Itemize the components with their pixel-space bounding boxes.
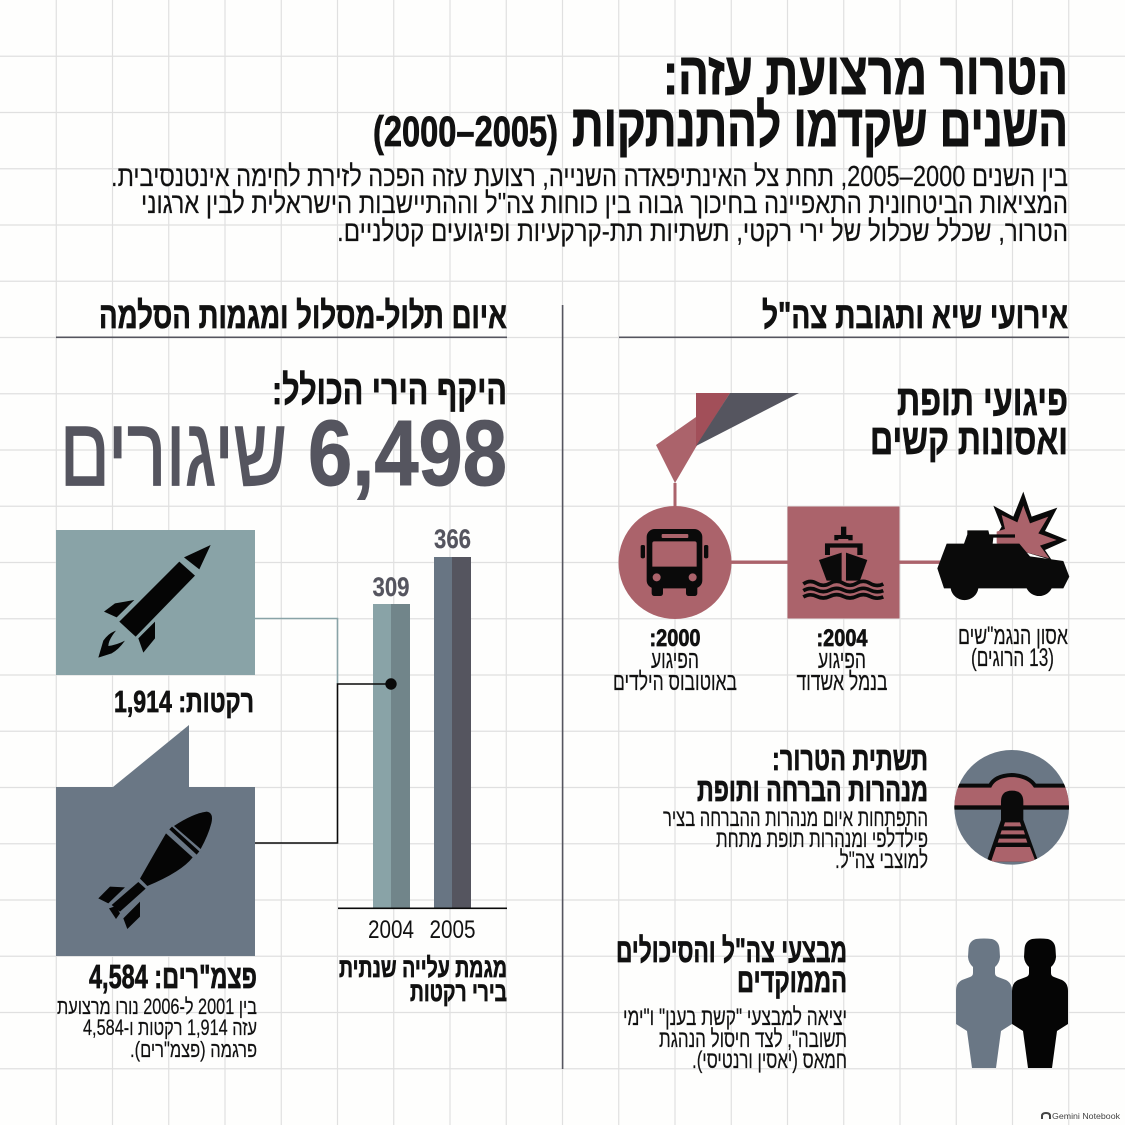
label: APC disaster: אסון הנגמ"שים xyxy=(958,622,1068,650)
icon: APC with explosion xyxy=(937,492,1069,600)
label: APC disaster xyxy=(958,622,1068,672)
label: 2004 Ashdod port attack: הפיגוע xyxy=(818,646,866,674)
caption: chart: מגמת עלייה שנתית xyxy=(339,953,507,983)
connector: rockets to chart xyxy=(255,618,338,684)
text: mortars: בין 2001 ל-2006 נורו מרצועת xyxy=(57,994,257,1019)
bar chart xyxy=(338,524,507,944)
footer: watermark: Gemini Notebook xyxy=(1052,1111,1121,1121)
panel: rockets xyxy=(56,530,255,719)
icon: two silhouettes xyxy=(956,938,1068,1068)
heading: IDF operations: מבצעי צה"ל והסיכולים xyxy=(616,932,847,970)
icon: rocket xyxy=(98,545,211,658)
label: 2004 Ashdod port attack: :2004 xyxy=(816,625,868,652)
heading: IDF operations xyxy=(616,932,847,1000)
heading: tunnels: מנהרות הברחה ותופת xyxy=(697,771,928,808)
text: tunnels: למוצבי צה"ל. xyxy=(835,847,928,874)
text: IDF operations: חמאס (יאסין ורנטיסי). xyxy=(692,1047,847,1074)
label: APC disaster: (13 הרוגים) xyxy=(971,644,1054,672)
icon: tunnel xyxy=(952,748,1072,868)
label: 2004 Ashdod port attack: בנמל אשדוד xyxy=(796,668,888,696)
title xyxy=(373,41,1068,159)
panel: attacks xyxy=(613,377,1069,696)
connector: mortars to chart xyxy=(255,678,397,843)
text: IDF operations: יציאה למבצעי "קשת בענן" ו"ימי xyxy=(623,1004,847,1031)
panel: IDF operations xyxy=(616,932,1068,1074)
label: mortars count: פצמ"רים: 4,584 xyxy=(89,958,257,995)
text: tunnels: פילדלפי ומנהרות תופת מתחת xyxy=(716,826,928,853)
intro text xyxy=(111,161,1068,248)
heading: attacks xyxy=(870,377,1068,464)
icon: ship xyxy=(788,506,900,618)
label: 2000 bus attack: הפיגוע xyxy=(651,646,699,674)
caption: chart xyxy=(339,953,507,1007)
panel: total fire xyxy=(60,367,507,506)
label: 2004 Ashdod port attack xyxy=(796,625,888,696)
label: 2000 bus attack: :2000 xyxy=(650,625,700,652)
heading: tunnels: תשתית הטרור: xyxy=(772,740,928,777)
caption: chart: בירי רקטות xyxy=(410,977,507,1007)
big number: 6,498 launches xyxy=(60,397,507,506)
text: IDF operations: תשובה", לצד חיסול הנהגת xyxy=(659,1026,847,1053)
text: mortars: עזה 1,914 רקטות ו-4,584 xyxy=(83,1015,257,1040)
label: 2000 bus attack: באוטובוס הילדים xyxy=(613,668,737,696)
label: 2000 bus attack xyxy=(613,625,737,696)
bar chart: 309 xyxy=(372,572,410,602)
heading: total fire: היקף הירי הכולל: xyxy=(272,367,507,413)
label: rockets count: רקטות: 1,914 xyxy=(114,684,254,719)
bar chart: 366 xyxy=(434,524,471,554)
bar chart: 2004 xyxy=(368,916,414,944)
title: (2005–2000) xyxy=(373,108,558,156)
text: mortars: פרגמה (פצמ"רים). xyxy=(130,1037,257,1062)
icon: mortar shell xyxy=(98,812,212,929)
big number: 6,498 launches: שיגורים xyxy=(60,397,287,506)
icon: flag pennant xyxy=(656,393,799,508)
bar chart: 2005 xyxy=(430,916,476,944)
intro text: בין השנים 2000–2005, תחת צל האינתיפאדה השנייה, רצועת עזה הפכה לזירת לחימה אינטנסיבית. xyxy=(111,161,1068,193)
big number: 6,498 launches: 6,498 xyxy=(308,401,507,505)
text: tunnels xyxy=(663,805,928,874)
heading: attacks: פיגועי תופת xyxy=(897,377,1068,425)
text: mortars xyxy=(57,994,257,1062)
heading: tunnels xyxy=(697,740,928,808)
panel: mortars xyxy=(56,725,257,1062)
panel: tunnels xyxy=(663,749,1069,868)
text: IDF operations xyxy=(623,1004,847,1074)
heading: left column: איום תלול-מסלול ומגמות הסלמה xyxy=(99,295,507,336)
icon: bus xyxy=(618,506,732,619)
heading: IDF operations: הממוקדים xyxy=(737,962,847,1000)
text: tunnels: התפתחות איום מנהרות ההברחה בציר xyxy=(663,805,928,832)
